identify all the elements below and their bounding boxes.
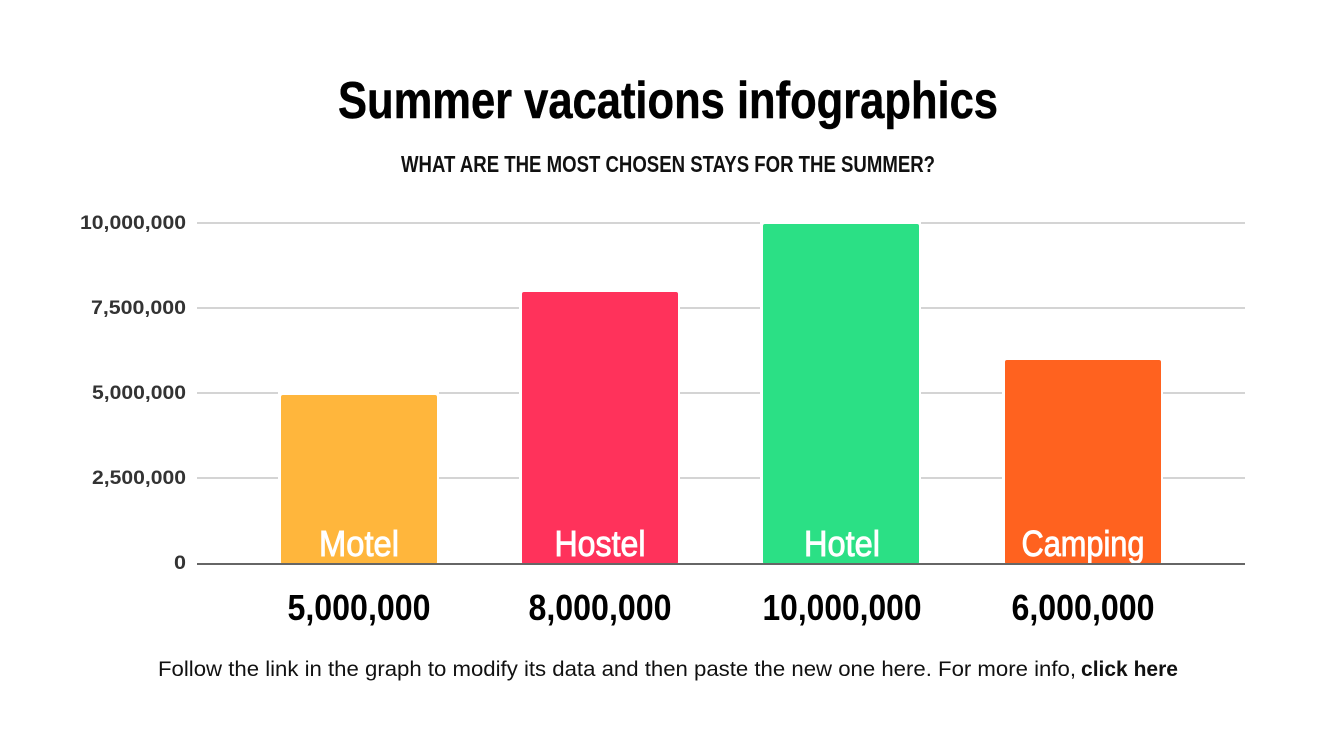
bar: Motel — [278, 392, 439, 566]
y axis labels: 2,500,000 — [92, 468, 186, 489]
value labels: 8,000,000 — [528, 587, 672, 628]
bar: Hotel — [760, 221, 921, 566]
bar chart — [80, 213, 1245, 574]
bar: Hostel — [519, 289, 680, 566]
value labels: 10,000,000 — [762, 587, 922, 628]
subtitle: WHAT ARE THE MOST CHOSEN STAYS FOR THE SUMMER? — [401, 151, 935, 177]
footer note: Follow the link in the graph to modify its data and then paste the new one here. For more info, — [158, 657, 1076, 681]
value labels: 6,000,000 — [1012, 587, 1154, 628]
y axis labels — [80, 213, 186, 574]
y axis labels: 0 — [174, 553, 186, 574]
bar: Hostel: Hostel — [554, 523, 646, 564]
title: Summer vacations infographics — [338, 72, 998, 130]
bar: Camping — [1002, 357, 1163, 566]
y axis labels: 10,000,000 — [80, 213, 186, 234]
bar: Hotel: Hotel — [804, 523, 880, 564]
y axis labels: 7,500,000 — [91, 298, 186, 319]
bar: Motel: Motel — [319, 523, 399, 564]
value labels — [288, 587, 1154, 628]
y axis labels: 5,000,000 — [92, 383, 186, 404]
value labels: 5,000,000 — [288, 587, 430, 628]
bar: Camping: Camping — [1022, 523, 1144, 564]
footer note: click here — [1081, 657, 1178, 681]
